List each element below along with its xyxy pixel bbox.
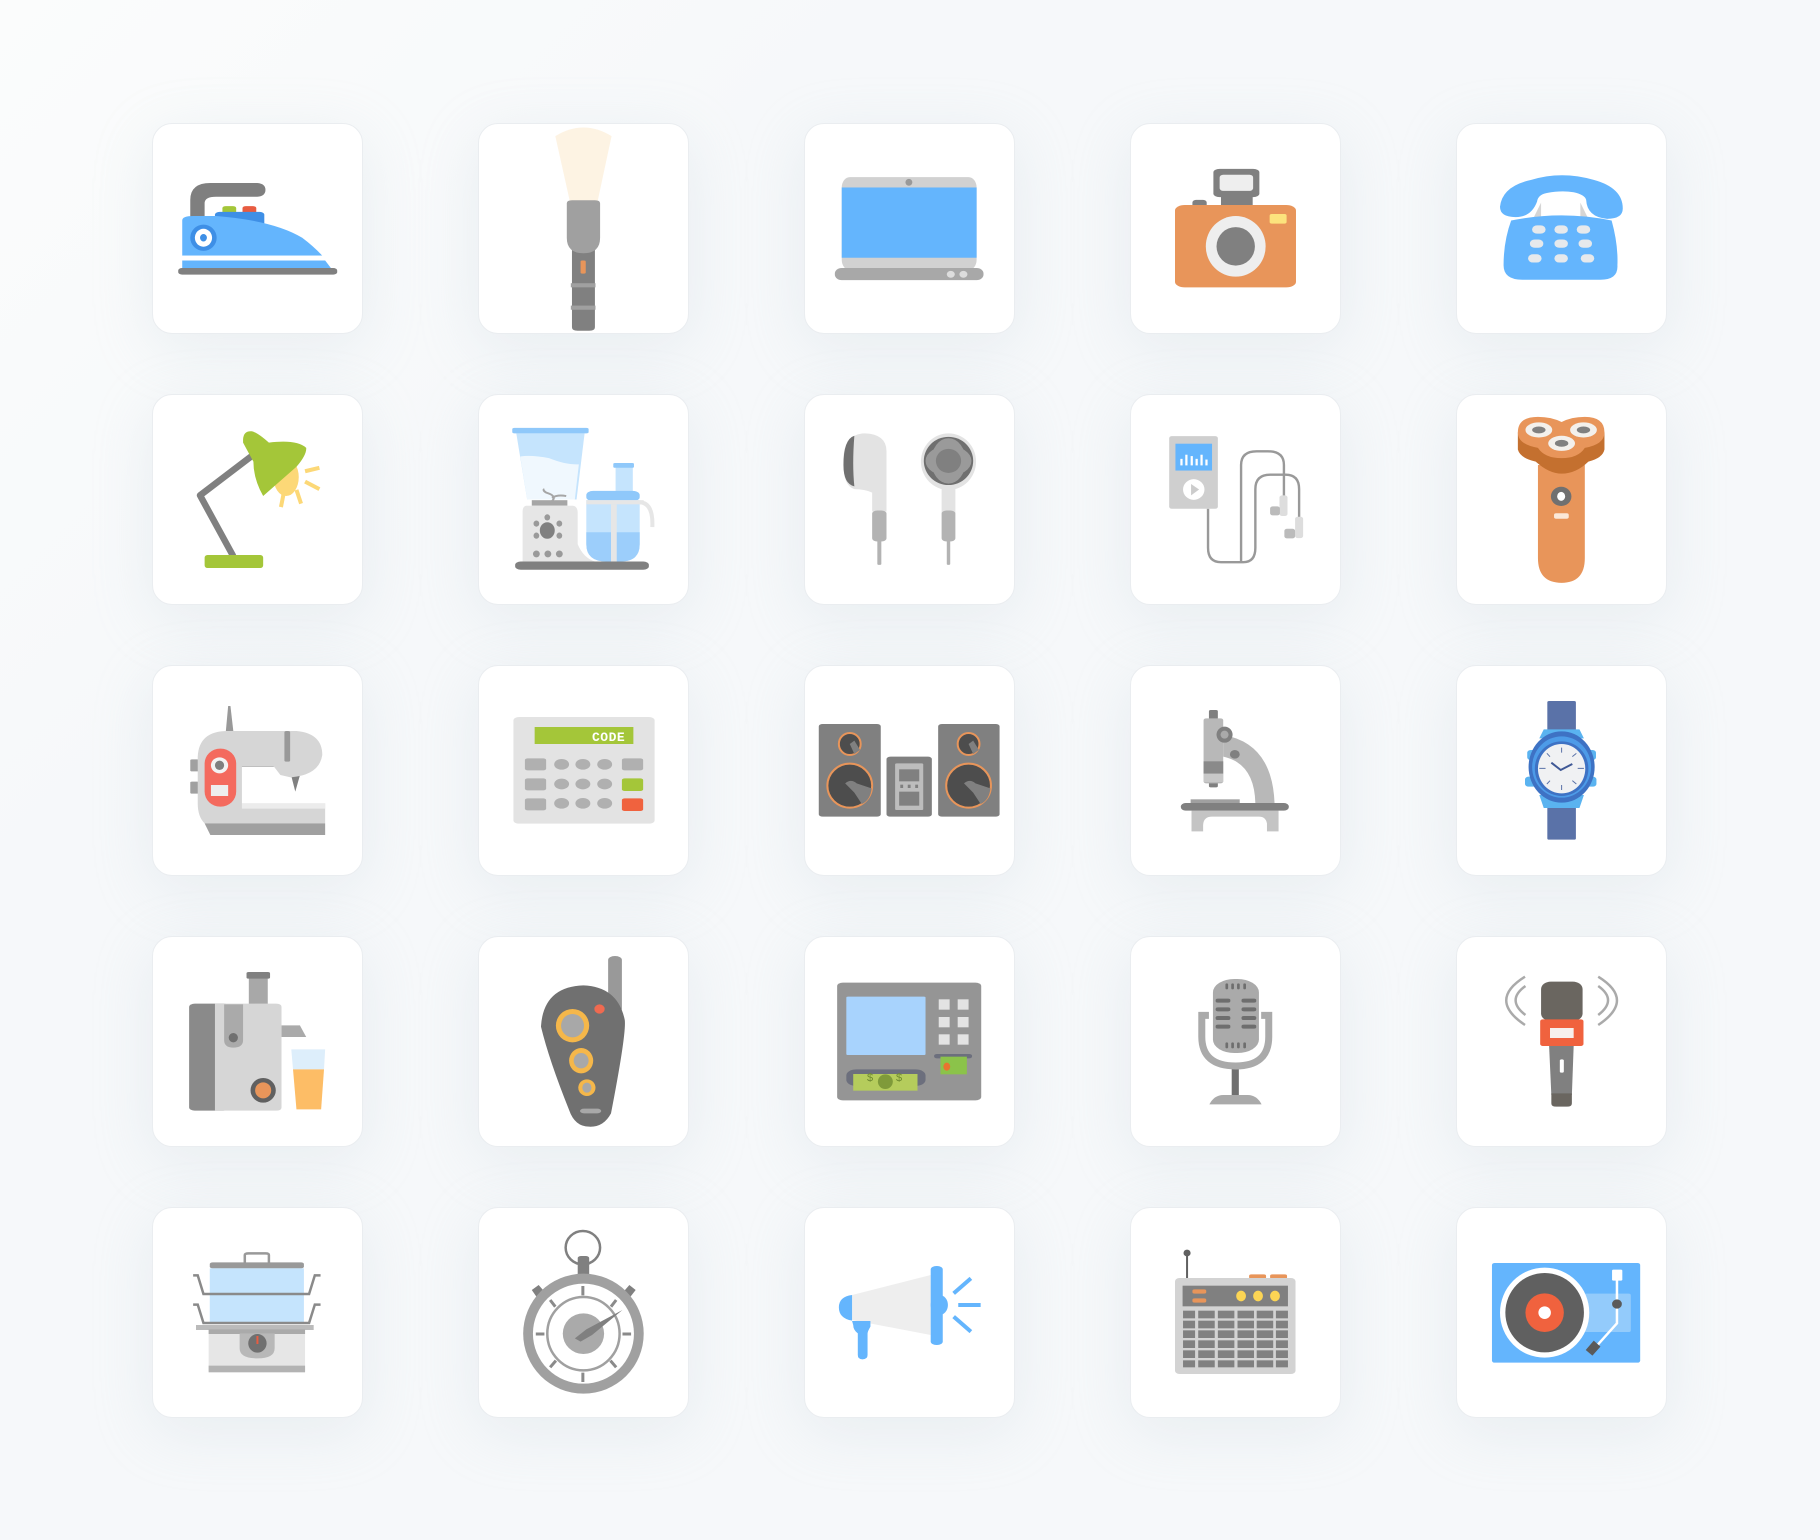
panel: iron [152,123,363,334]
speaker grille [1183,1311,1288,1367]
icon: earbuds [843,434,976,565]
icon: laptop [834,177,984,280]
icon: stopwatch [523,1230,644,1394]
laptop screen [842,187,977,258]
panel: radio [1130,1207,1341,1418]
stopwatch hand [575,1310,622,1342]
icon: walkie talkie [541,956,625,1127]
icon: wristwatch [1525,701,1596,840]
panel: juicer [152,936,363,1147]
stage [1181,803,1289,811]
panel: stopwatch [478,1207,689,1418]
panel: studio microphone [1130,936,1341,1147]
icon: code keypad [514,717,654,824]
panel: walkie talkie [478,936,689,1147]
base bar [515,561,649,570]
glass of juice [291,1049,325,1069]
icon: telephone [1500,175,1623,280]
keypad display text: CODE [592,730,625,745]
iron body [182,216,322,256]
panel: camera [1130,123,1341,334]
watch face [1538,744,1585,793]
panel: sewing machine [152,665,363,876]
lamp shade [243,431,306,496]
banknote symbols [867,1072,902,1084]
icon: radio [1175,1250,1296,1374]
icon: studio microphone [1198,979,1272,1104]
microphone head [1213,979,1259,1053]
panel: food processor [478,394,689,605]
panel: electric shaver [1456,394,1667,605]
icon: clothes iron [178,183,338,275]
panel: laptop [804,123,1015,334]
vinyl record [1500,1268,1589,1358]
banknote symbols: $ [896,1072,902,1084]
panel: reporter microphone [1456,936,1667,1147]
icon: camera [1175,168,1296,288]
icon: food steamer [193,1252,321,1372]
panel: desk lamp [152,394,363,605]
panel: turntable [1456,1207,1667,1418]
icon: electric shaver [1518,416,1604,583]
camera body [1175,205,1296,287]
icon: makeup brush [556,128,612,331]
icon: music player with earphones [1169,436,1303,564]
panel: music player [1130,394,1341,605]
panel: ATM [804,936,1015,1147]
icon: cash machine [837,982,982,1100]
icon: microscope [1180,710,1289,832]
icon: reporter microphone [1505,976,1618,1107]
banknote symbols: $ [867,1072,873,1084]
handset [1500,175,1623,219]
panel: makeup brush [478,123,689,334]
panel: keypad [478,665,689,876]
icon: stereo system [818,724,1000,817]
icon: sewing machine [190,706,326,835]
panel: megaphone [804,1207,1015,1418]
panel: microscope [1130,665,1341,876]
icon: record turntable [1492,1263,1640,1363]
panel: stereo speakers [804,665,1015,876]
panel: food steamer [152,1207,363,1418]
red control panel [205,749,236,807]
icon: desk lamp [196,431,320,568]
icon: juicer with glass [189,972,326,1111]
panel: telephone [1456,123,1667,334]
icon: megaphone [838,1266,981,1360]
icon: blender and food processor [512,428,654,570]
panel: earbuds [804,394,1015,605]
panel: wristwatch [1456,665,1667,876]
